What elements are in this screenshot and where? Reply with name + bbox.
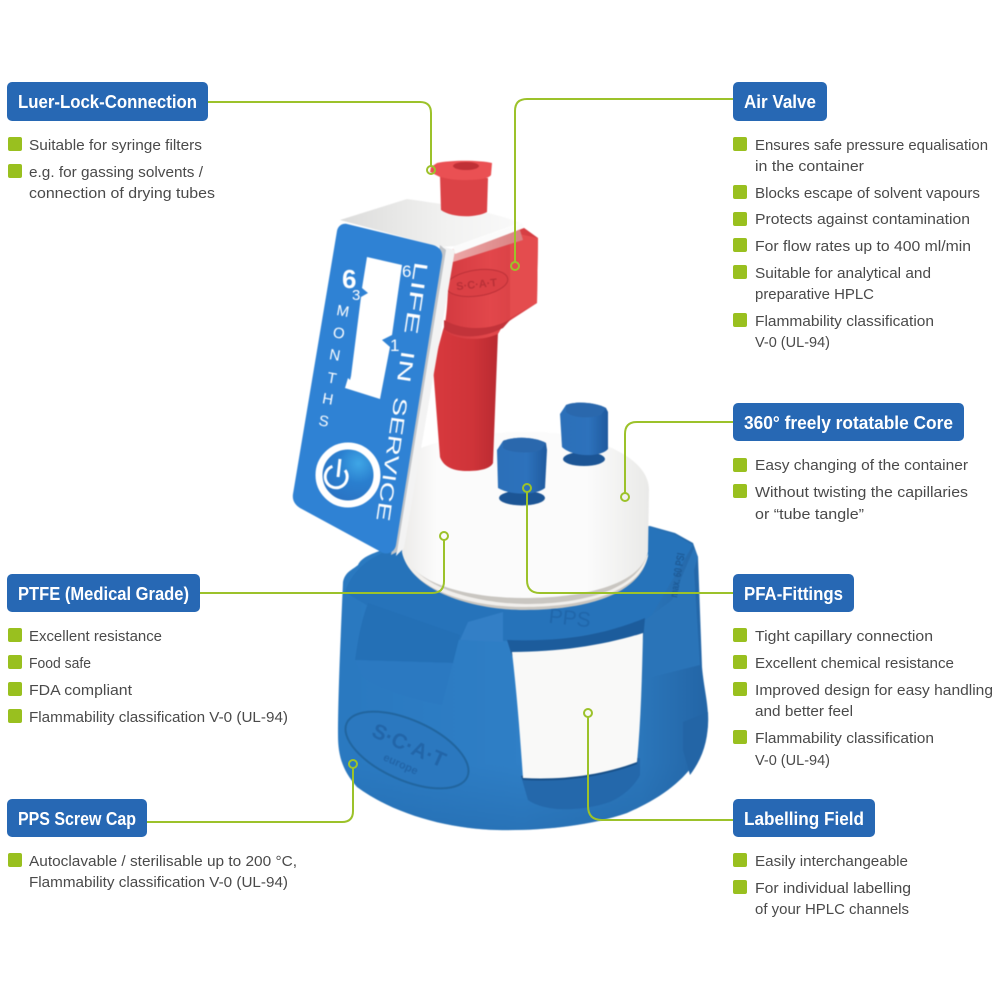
leader line: air valve — [511, 99, 733, 270]
MONTHS label — [317, 302, 350, 431]
leader line: labelling field — [584, 709, 733, 820]
heading: 360° freely rotatable Core — [744, 413, 953, 433]
PPS embossed text: PPS — [548, 605, 592, 632]
left grip recess — [355, 603, 460, 663]
panel: PPS Screw Cap: Flammability classification V-0 (UL-94) — [29, 875, 288, 891]
heading — [7, 574, 200, 612]
PFA fitting left — [497, 438, 547, 506]
rim text: max. 60 PSI — [668, 552, 688, 599]
panel: Air Valve: Protects against contamination — [755, 212, 970, 228]
scale numbers: 3 — [352, 287, 360, 304]
label frame — [507, 618, 645, 657]
scale numbers: 1 — [390, 336, 399, 355]
panel: Labelling Field: For individual labelling — [755, 881, 911, 897]
panel: Luer-Lock-Connection: Suitable for syringe filters — [29, 138, 202, 154]
heading — [7, 799, 147, 837]
panel: 360° freely rotatable Core — [733, 403, 968, 523]
heading: Air Valve — [744, 92, 816, 112]
panel: PPS Screw Cap — [7, 799, 297, 891]
panel: Luer-Lock-Connection — [7, 82, 215, 202]
LIFE IN SERVICE label — [371, 260, 431, 522]
panel: PTFE (Medical Grade): Excellent resistance — [29, 629, 162, 645]
panel: PFA-Fittings: V-0 (UL-94) — [755, 753, 830, 769]
leader line: screw cap — [147, 760, 357, 822]
indicator window — [345, 257, 402, 399]
leader line: rotatable core — [621, 422, 733, 501]
heading — [733, 574, 854, 612]
panel: Labelling Field: of your HPLC channels — [755, 902, 909, 918]
panel: Air Valve: Flammability classification — [755, 314, 934, 330]
PFA fitting right — [560, 403, 608, 466]
heading — [733, 799, 875, 837]
panel: PTFE (Medical Grade): FDA compliant — [29, 683, 132, 699]
heading: PTFE (Medical Grade) — [18, 584, 189, 604]
heading: Luer-Lock-Connection — [18, 92, 197, 112]
heading: PPS Screw Cap — [18, 809, 136, 829]
panel: PFA-Fittings: Flammability classification — [755, 731, 934, 747]
MONTHS label: S — [317, 412, 330, 431]
MONTHS label: T — [326, 369, 338, 388]
heading — [7, 82, 208, 121]
panel: Air Valve: V-0 (UL-94) — [755, 335, 830, 351]
MONTHS label: H — [321, 390, 335, 409]
PTFE rotatable core — [402, 432, 649, 610]
luer-lock connector — [430, 161, 492, 216]
heading: Labelling Field — [744, 809, 864, 829]
panel: Air Valve: Suitable for analytical and — [755, 266, 931, 282]
PPS screw cap body — [335, 526, 708, 830]
service life indicator tag — [293, 224, 442, 554]
scale numbers — [342, 262, 411, 355]
panel: Labelling Field: Easily interchangeable — [755, 854, 908, 870]
panel: Air Valve: Blocks escape of solvent vapours — [755, 186, 980, 202]
product illustration: solvent safety cap — [293, 161, 708, 830]
LIFE IN SERVICE label: SERVICE — [371, 396, 411, 522]
red air valve — [433, 225, 538, 471]
panel: PFA-Fittings: Tight capillary connection — [755, 629, 933, 645]
labelling field — [512, 633, 643, 778]
leader line: luer-lock — [208, 102, 435, 174]
panel: Air Valve: Ensures safe pressure equalisation — [755, 138, 988, 154]
LIFE IN SERVICE label: LIFE — [399, 260, 431, 336]
panel: PFA-Fittings: and better feel — [755, 704, 853, 720]
panel: PFA-Fittings: Excellent chemical resistance — [755, 656, 954, 672]
leader line: PTFE — [200, 532, 448, 593]
panel: PTFE (Medical Grade): Flammability classification V-0 (UL-94) — [29, 710, 288, 726]
valve logo: S·C·A·T — [456, 277, 498, 293]
panel: Air Valve — [733, 82, 988, 351]
logo oval: S·C·A·T — [368, 719, 449, 772]
logo oval — [335, 696, 479, 804]
leader line: PFA fittings — [523, 484, 733, 593]
panel: Labelling Field — [733, 799, 911, 918]
panel: Luer-Lock-Connection: connection of drying tubes — [29, 186, 215, 202]
MONTHS label: M — [335, 302, 350, 321]
panel: Air Valve: preparative HPLC — [755, 287, 874, 303]
panel: Air Valve: in the container — [755, 159, 864, 175]
panel: PFA-Fittings: Improved design for easy handling — [755, 683, 993, 699]
scale numbers: 6 — [402, 262, 411, 281]
panel: Air Valve: For flow rates up to 400 ml/min — [755, 239, 971, 255]
scale numbers: 6 — [342, 264, 356, 294]
LIFE IN SERVICE label: IN — [392, 349, 418, 384]
panel: Luer-Lock-Connection: e.g. for gassing solvents / — [29, 165, 204, 181]
panel: PPS Screw Cap: Autoclavable / sterilisable up to 200 °C, — [29, 854, 297, 870]
heading — [733, 82, 827, 121]
power button — [319, 446, 377, 504]
panel: 360° freely rotatable Core: or “tube tangle” — [755, 507, 864, 523]
heading: PFA-Fittings — [744, 584, 843, 604]
MONTHS label: N — [328, 346, 342, 365]
MONTHS label: O — [332, 324, 346, 343]
panel: PFA-Fittings — [733, 574, 993, 769]
white clip — [340, 199, 524, 556]
panel: 360° freely rotatable Core: Easy changing of the container — [755, 458, 968, 474]
heading — [733, 403, 964, 441]
panel: 360° freely rotatable Core: Without twisting the capillaries — [755, 485, 968, 501]
logo oval: europe — [381, 752, 420, 778]
panel: PTFE (Medical Grade) — [7, 574, 288, 726]
panel: PTFE (Medical Grade): Food safe — [29, 656, 91, 672]
